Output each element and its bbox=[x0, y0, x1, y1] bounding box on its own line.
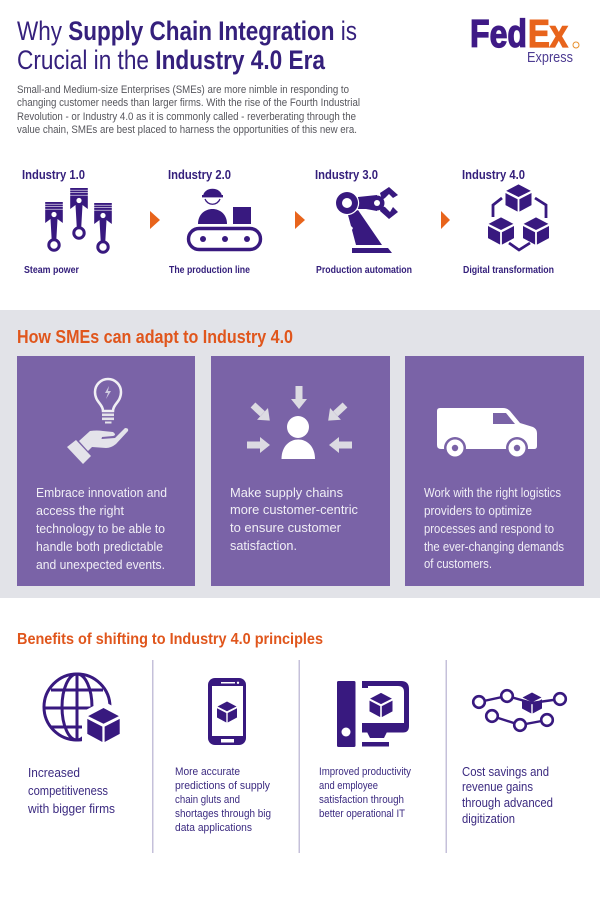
benefit: cost savings: digitization bbox=[462, 812, 515, 826]
stage: Industry 3.0 bbox=[315, 168, 412, 276]
icon: person with inward arrows bbox=[247, 386, 352, 459]
benefit: competitiveness: with bigger firms bbox=[27, 802, 115, 816]
text: card 1: Embrace innovation and bbox=[36, 485, 167, 500]
text: card 2: more customer-centric bbox=[230, 502, 358, 517]
text: card 1: technology to be able to bbox=[36, 521, 165, 536]
card: logistics providers bbox=[405, 356, 584, 586]
icon: worker on production line bbox=[188, 189, 260, 250]
benefit: cost savings: revenue gains bbox=[462, 780, 533, 794]
text: card 2: satisfaction. bbox=[230, 538, 297, 553]
benefit: predictions: shortages through big bbox=[175, 808, 271, 820]
text: card 3: processes and respond to bbox=[424, 521, 554, 536]
stage: Industry 2.0 bbox=[168, 168, 260, 276]
benefit: predictions: More accurate bbox=[175, 766, 240, 778]
logo: FedEx Express bbox=[470, 13, 579, 66]
logo: FedEx Express: Fed bbox=[470, 13, 527, 56]
stage: Industry 4.0: Industry 4.0 bbox=[462, 168, 525, 182]
icon: globe with cube bbox=[44, 674, 124, 748]
text: card 2 bbox=[230, 485, 358, 553]
arrow 1 bbox=[150, 211, 160, 229]
benefit: productivity: and employee bbox=[319, 780, 378, 792]
icon: robot arm bbox=[335, 187, 398, 253]
text: card 3: providers to optimize bbox=[424, 503, 532, 518]
benefit: cost savings: through advanced bbox=[462, 796, 553, 810]
text: card 3: the ever-changing demands bbox=[424, 539, 564, 554]
stage: Industry 4.0: Digital transformation bbox=[463, 265, 554, 276]
text: card 3: Work with the right logistics bbox=[424, 485, 561, 500]
icon: desktop computer with cube bbox=[337, 681, 409, 747]
arrow 2 bbox=[295, 211, 305, 229]
heading: how SMEs can adapt: How SMEs can adapt to Industry 4.0 bbox=[17, 327, 293, 347]
panel: how SMEs can adapt bbox=[0, 310, 600, 598]
stage: Industry 3.0: Industry 3.0 bbox=[315, 168, 378, 182]
icon: delivery van bbox=[437, 408, 537, 459]
logo: FedEx Express: Express bbox=[527, 50, 573, 66]
title: Crucial in the Industry 4.0 Era bbox=[17, 45, 326, 75]
icon: connected cubes bbox=[488, 184, 549, 250]
benefit: predictions: chain gluts and bbox=[175, 794, 240, 806]
benefit: predictions: data applications bbox=[175, 822, 252, 834]
stage: Industry 1.0 bbox=[22, 168, 112, 276]
card: customer-centric bbox=[211, 356, 390, 586]
benefit: cost savings bbox=[462, 690, 566, 826]
text: card 2: to ensure customer bbox=[230, 520, 342, 535]
stage: Industry 1.0: Steam power bbox=[24, 265, 79, 276]
benefit: productivity: satisfaction through bbox=[319, 794, 404, 806]
benefit: competitiveness: Increased bbox=[28, 766, 80, 780]
heading: benefits: Benefits of shifting to Industry 4.0 principles bbox=[17, 631, 323, 648]
stage: Industry 2.0: The production line bbox=[169, 265, 250, 276]
benefit: productivity: better operational IT bbox=[319, 808, 405, 820]
benefit: predictions: predictions of supply bbox=[175, 780, 270, 792]
text: card 1: and unexpected events. bbox=[36, 557, 165, 572]
stage: Industry 3.0: Production automation bbox=[316, 265, 412, 276]
benefit: productivity: Improved productivity bbox=[319, 766, 411, 778]
logo: FedEx Express: Ex bbox=[528, 13, 568, 56]
intro text: value chain, SMEs are best placed to harness the opportunities of this new era. bbox=[17, 124, 357, 136]
intro text bbox=[17, 84, 360, 136]
icon: light bulb and hand bbox=[67, 379, 128, 464]
benefit: competitiveness bbox=[27, 674, 124, 816]
icon: pistons bbox=[45, 188, 112, 252]
stage: Industry 2.0: Industry 2.0 bbox=[168, 168, 231, 182]
benefit: competitiveness: competitiveness bbox=[28, 784, 108, 798]
benefit: cost savings: Cost savings and bbox=[462, 765, 549, 779]
text: card 3: of customers. bbox=[424, 556, 492, 571]
intro text: Small-and Medium-size Enterprises (SMEs) are more nimble in responding to bbox=[17, 84, 349, 96]
intro text: changing customer needs than larger firms. With the rise of the Fourth Industrial bbox=[17, 97, 360, 109]
icon: smartphone with cube bbox=[208, 678, 246, 745]
title: Why Supply Chain Integration is bbox=[17, 16, 357, 46]
intro text: Revolution - or Industry 4.0 as it is commonly called - reverberating through the bbox=[17, 111, 356, 123]
text: card 2: Make supply chains bbox=[230, 485, 343, 500]
text: card 1: access the right bbox=[36, 503, 124, 518]
card: embrace innovation bbox=[17, 356, 195, 586]
text: card 1: handle both predictable bbox=[36, 539, 163, 554]
title bbox=[17, 16, 357, 75]
benefit: productivity bbox=[319, 681, 411, 820]
stage: Industry 4.0 bbox=[462, 168, 554, 276]
benefit: predictions bbox=[175, 678, 271, 834]
stage: Industry 1.0: Industry 1.0 bbox=[22, 168, 85, 182]
text: card 3 bbox=[424, 485, 564, 571]
icon: network with cube bbox=[473, 690, 566, 731]
text: card 1 bbox=[36, 485, 167, 572]
arrow 3 bbox=[441, 211, 450, 229]
